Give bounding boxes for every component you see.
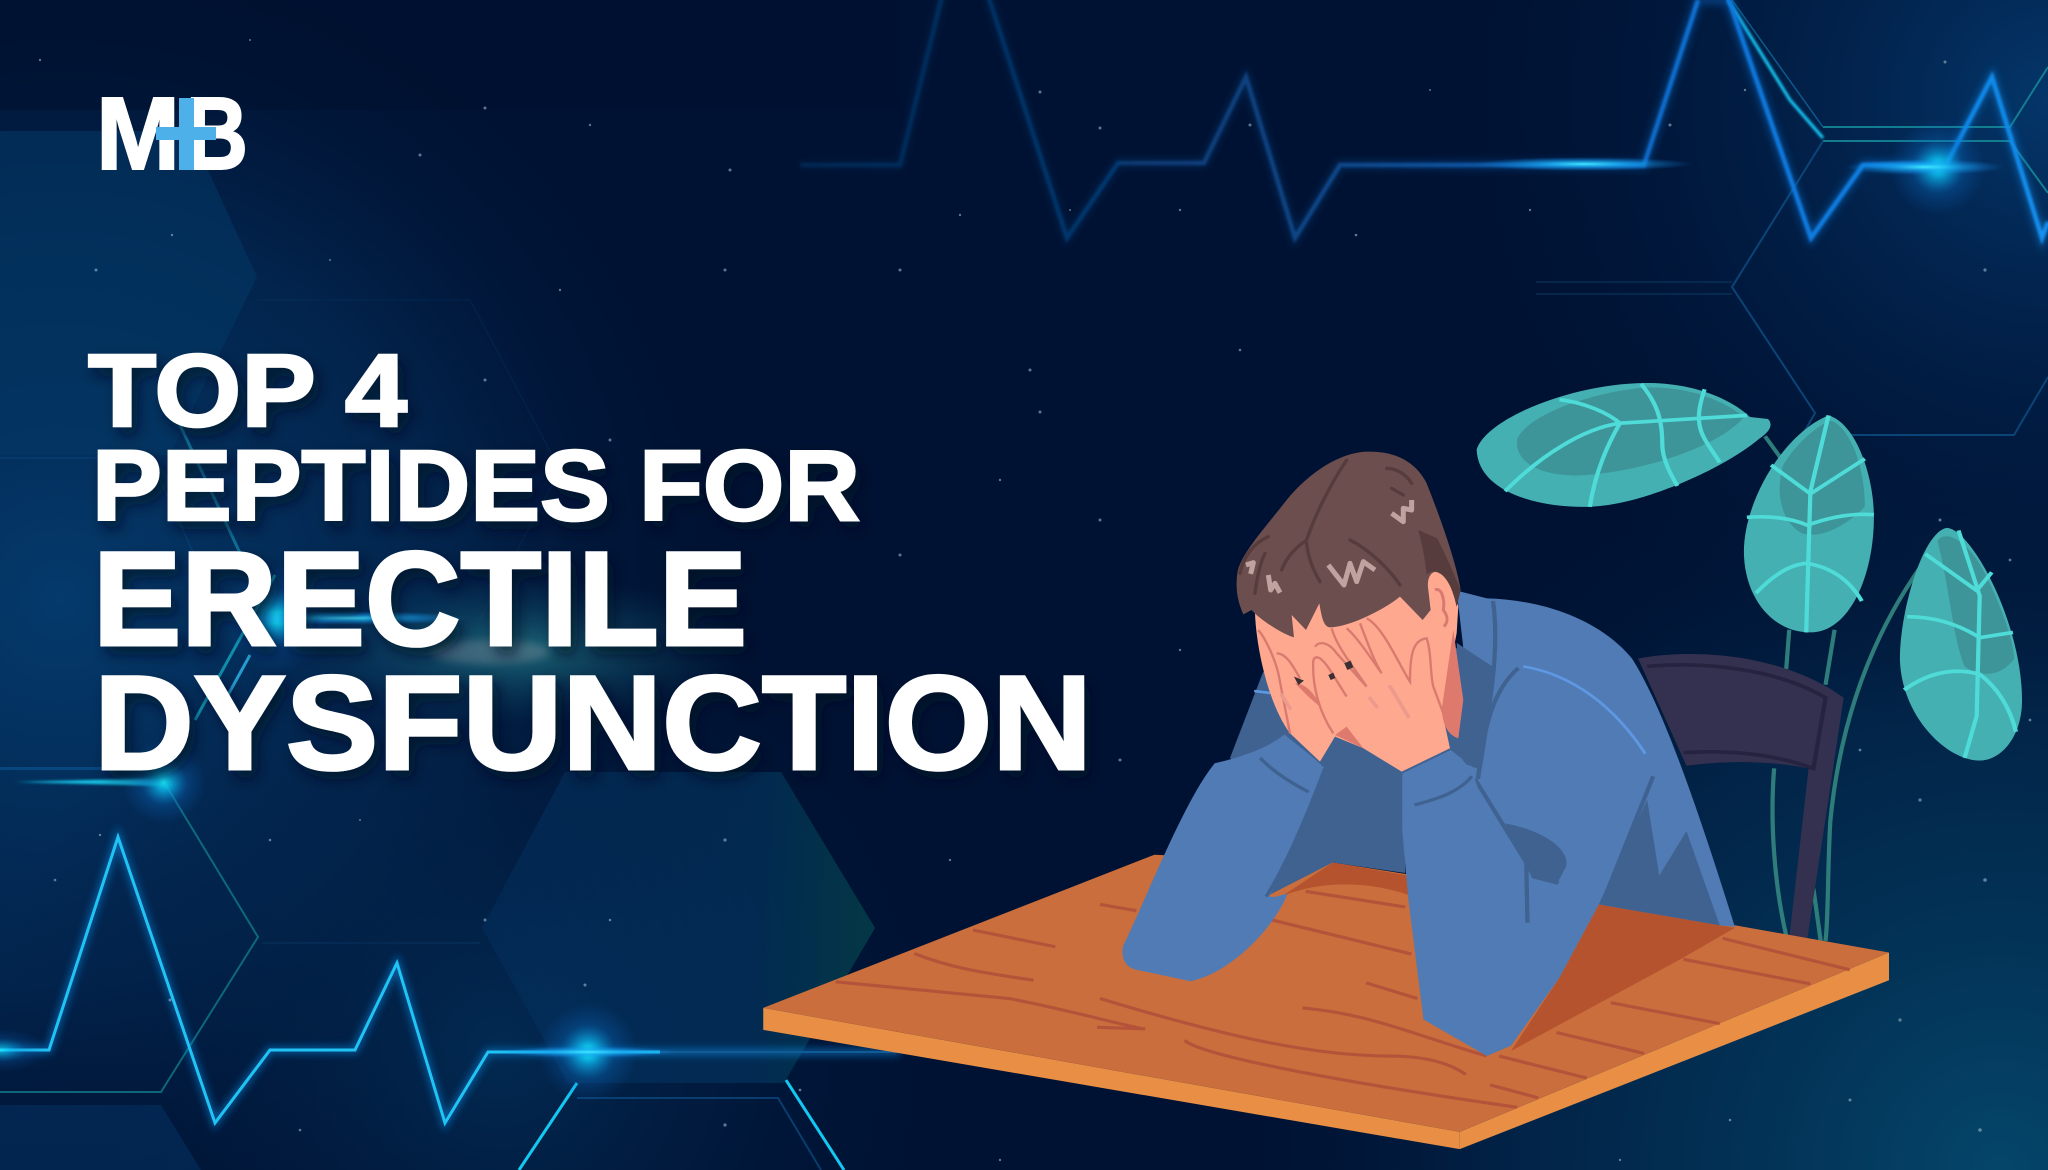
title: PEPTIDES FOR	[92, 430, 860, 542]
man: sleeves and cuffs	[1122, 734, 1480, 981]
glow behind title	[180, 425, 750, 725]
light flares: top right	[1474, 119, 2005, 215]
ECG line: lower left	[0, 778, 900, 1123]
ECG line: top right	[800, 0, 2048, 238]
logo: M+B	[96, 76, 248, 191]
man: torso and arms	[1230, 591, 1735, 1056]
title: TOP 4	[88, 333, 407, 448]
leaf: top	[1477, 383, 1771, 507]
man: head and hands	[1237, 452, 1463, 772]
plant stems and leaves	[1477, 383, 2022, 941]
leaf: middle	[1744, 415, 1874, 632]
title	[88, 333, 1092, 798]
logo: M+B: M	[96, 76, 180, 191]
ear	[1435, 589, 1447, 627]
hair	[1237, 452, 1461, 637]
title: DYSFUNCTION	[94, 649, 1092, 798]
illustration: man at table with plant	[763, 383, 2022, 1149]
title: ERECTILE	[93, 525, 747, 674]
logo: M+B: B	[186, 76, 248, 191]
table	[763, 855, 1889, 1149]
light flares: lower left	[0, 740, 678, 1102]
chair	[1638, 654, 1844, 938]
leaf: right	[1900, 528, 2022, 761]
